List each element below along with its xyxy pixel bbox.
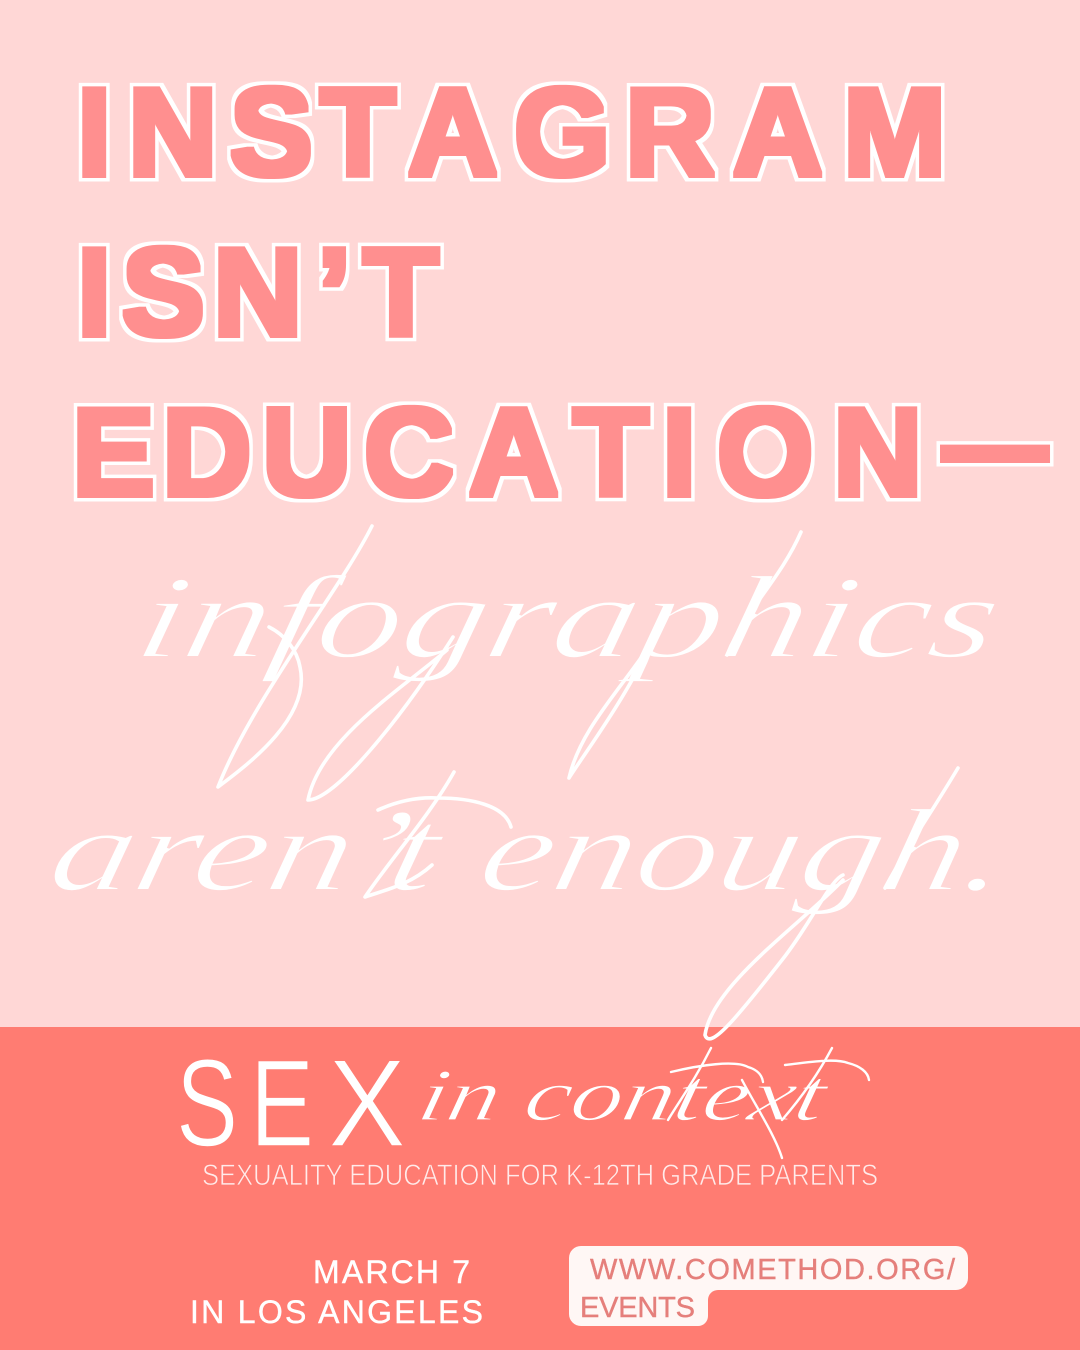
heading: bold outlined title: EDUCATION [72, 384, 923, 522]
script heading: infographics aren't enough: enough. [470, 785, 1022, 916]
heading: bold outlined title: INSTAGRAM [77, 64, 946, 202]
logo: SEX in context: in context [411, 1055, 837, 1137]
script heading: infographics aren't enough: infographics [127, 552, 1012, 683]
logo: SEX in context: X [328, 1035, 406, 1173]
panel: pink background [0, 0, 1080, 1027]
logo: SEX in context: S [176, 1035, 238, 1173]
script heading: infographics aren't enough: aren’t [40, 785, 456, 916]
tagline: SEXUALITY EDUCATION FOR K-12TH GRADE PARENTS [202, 1159, 878, 1192]
event date and place: IN LOS ANGELES [190, 1294, 483, 1330]
heading: bold outlined title: — [943, 376, 1047, 514]
link highlight with url [569, 1246, 968, 1326]
logo: SEX in context: E [250, 1035, 314, 1173]
event date and place: MARCH 7 [313, 1254, 470, 1290]
link highlight with url: EVENTS [580, 1292, 695, 1324]
heading: bold outlined title: ISN’T [77, 224, 439, 362]
link highlight with url: WWW.COMETHOD.ORG/ [590, 1254, 956, 1286]
heading: bold outlined title [72, 64, 1047, 522]
panel: coral footer band [0, 1027, 1080, 1350]
logo: SEX in context [176, 1035, 869, 1173]
event date and place [190, 1254, 483, 1330]
script heading: infographics aren't enough [40, 526, 1022, 1039]
